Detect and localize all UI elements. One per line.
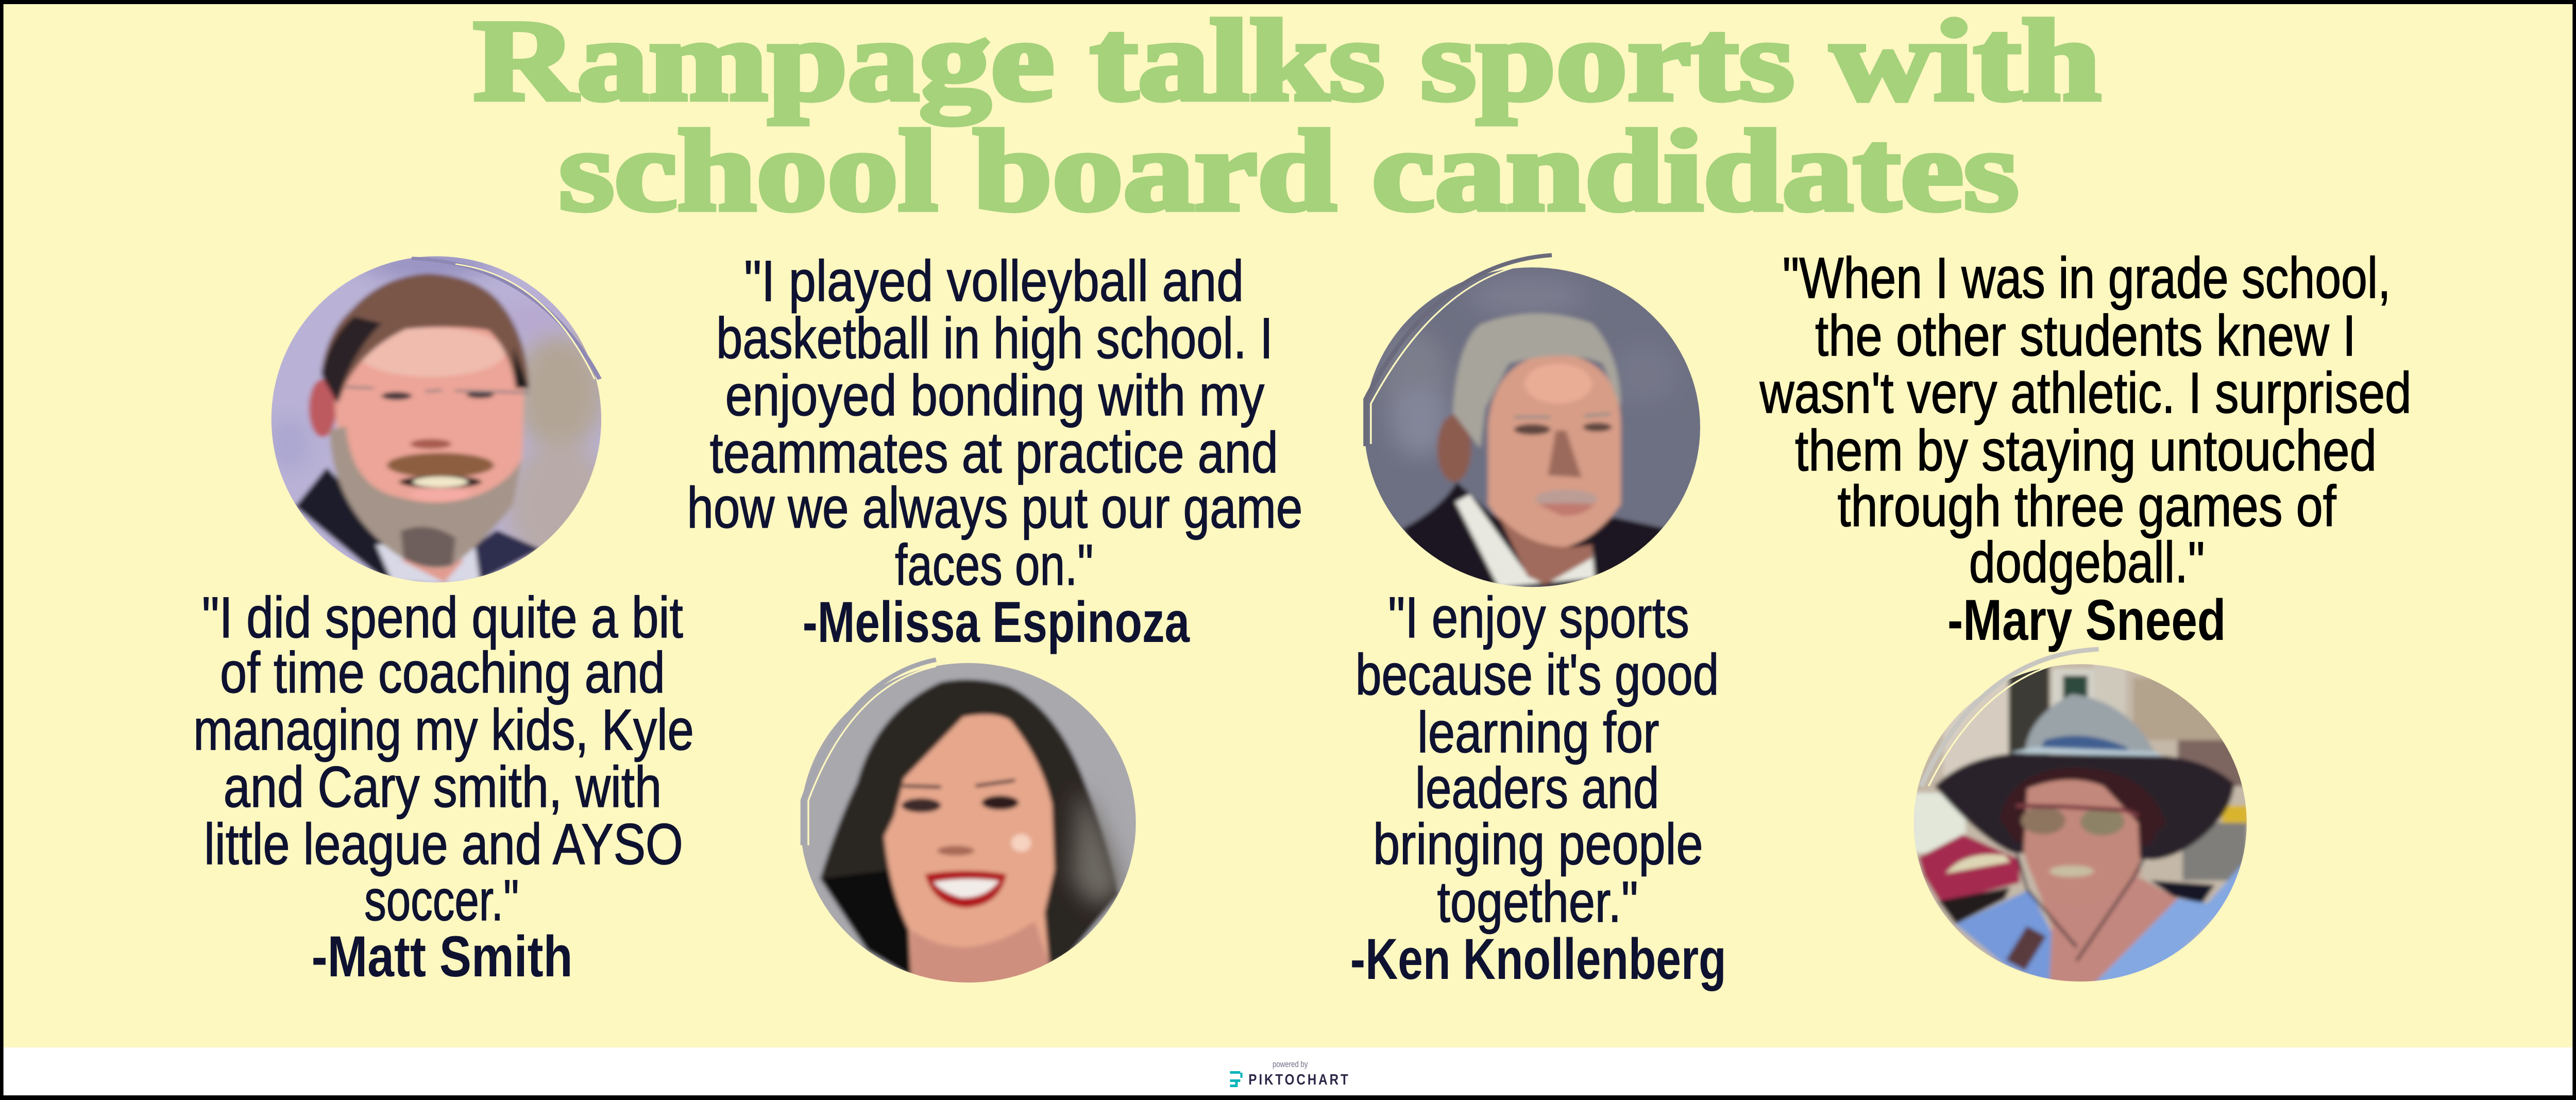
panel: Melissa Espinoza (687, 249, 1302, 994)
quote: Mary Sneed: wasn't very athletic. I surprised (1759, 361, 2412, 425)
photo: Matt Smith portrait (271, 256, 602, 582)
quote: Matt Smith: "I did spend quite a bit (202, 585, 683, 650)
footer: Piktochart credit (1230, 1060, 1348, 1088)
panel: Mary Sneed (1759, 246, 2412, 1000)
panel: Matt Smith (193, 247, 694, 989)
quote: Melissa Espinoza: "I played volleyball and (744, 249, 1244, 313)
quote: Matt Smith: soccer." (364, 868, 519, 933)
logo wordmark: PIKTOCHART (1248, 1071, 1348, 1088)
quote: Ken Knollenberg: because it's good (1355, 642, 1719, 707)
quote: Ken Knollenberg: together." (1437, 870, 1638, 934)
title: school board candidates (559, 106, 2019, 235)
quote: Ken Knollenberg: "I enjoy sports (1388, 585, 1689, 650)
quote: Mary Sneed (1759, 246, 2412, 595)
name: Melissa Espinoza: -Melissa Espinoza (803, 590, 1190, 654)
title (473, 0, 2101, 235)
quote: Melissa Espinoza: basketball in high school. I (716, 306, 1273, 370)
quote: Melissa Espinoza: teammates at practice and (710, 420, 1278, 485)
footer caption: powered by (1273, 1060, 1308, 1069)
quote: Matt Smith: managing my kids, Kyle (193, 698, 694, 762)
quote: Melissa Espinoza (687, 249, 1302, 597)
quote: Ken Knollenberg: bringing people (1373, 812, 1703, 876)
quote: Mary Sneed: dodgeball." (1969, 530, 2205, 595)
name: Matt Smith: -Matt Smith (312, 924, 573, 989)
quote: Ken Knollenberg: leaders and (1415, 756, 1659, 820)
photo: Ken Knollenberg portrait (1363, 253, 1700, 587)
icon: Piktochart logo (1230, 1071, 1243, 1087)
quote: Matt Smith: of time coaching and (220, 640, 665, 705)
quote: Mary Sneed: the other students knew I (1815, 303, 2356, 368)
quote: Mary Sneed: through three games of (1838, 474, 2336, 538)
name: Ken Knollenberg: -Ken Knollenberg (1350, 927, 1726, 991)
photo: Melissa Espinoza portrait (801, 657, 1136, 983)
quote: Mary Sneed: them by staying untouched (1795, 418, 2377, 483)
quote: Matt Smith: little league and AYSO (204, 812, 683, 876)
quote: Ken Knollenberg (1355, 585, 1719, 934)
quote: Ken Knollenberg: learning for (1417, 700, 1659, 765)
quote: Matt Smith (193, 585, 694, 933)
panel: Ken Knollenberg (1332, 247, 1740, 991)
quote: Matt Smith: and Cary smith, with (224, 755, 662, 819)
quote: Mary Sneed: "When I was in grade school, (1783, 246, 2391, 310)
quote: Melissa Espinoza: how we always put our game (687, 476, 1302, 540)
quote: Melissa Espinoza: enjoyed bonding with my (725, 363, 1265, 428)
name: Mary Sneed: -Mary Sneed (1947, 588, 2226, 652)
photo: Mary Sneed portrait (1913, 647, 2247, 982)
quote: Melissa Espinoza: faces on." (895, 533, 1093, 597)
